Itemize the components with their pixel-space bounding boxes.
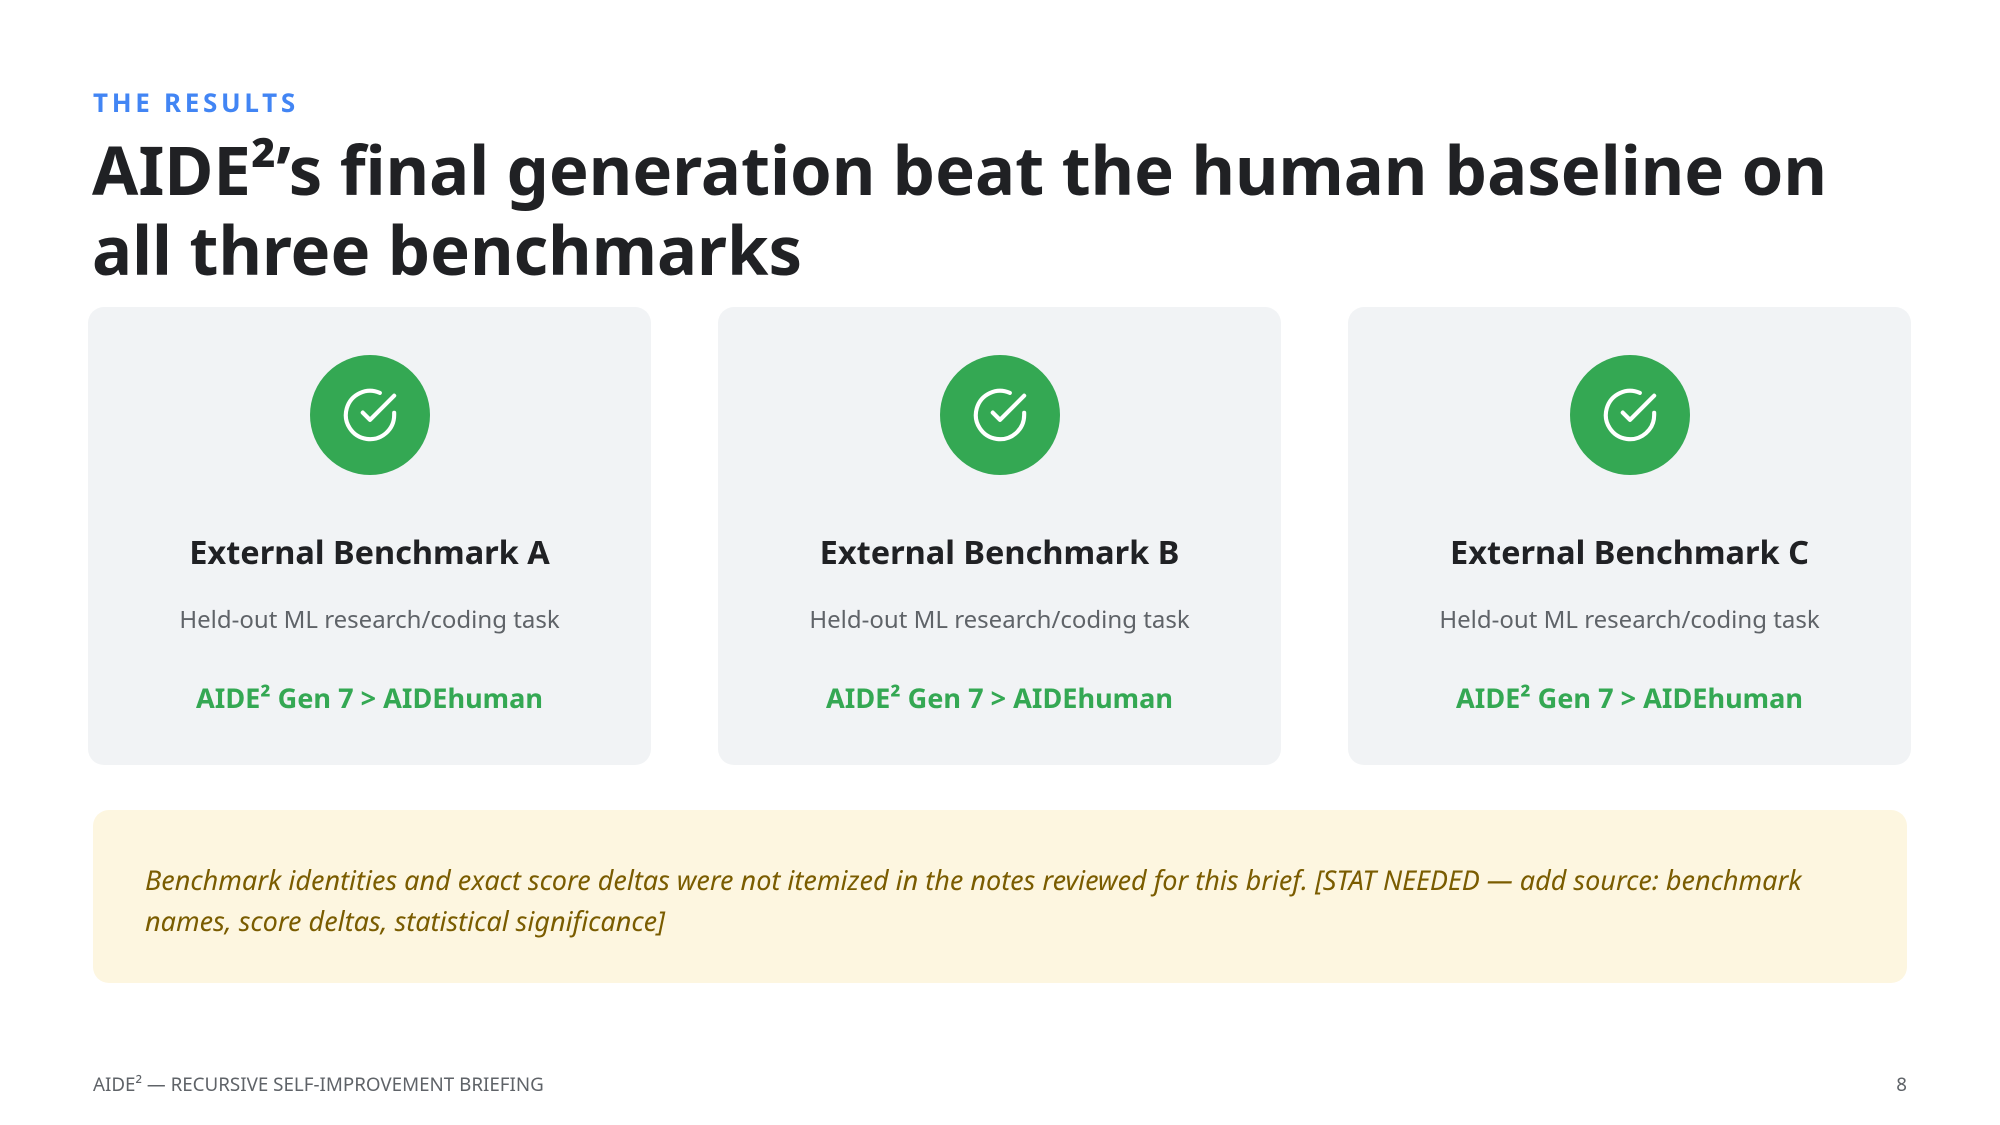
footer label: AIDE² — RECURSIVE SELF-IMPROVEMENT BRIEFING: [93, 1072, 544, 1097]
callout: caveat note: [93, 810, 1907, 983]
benchmark B description: Held-out ML research/coding task: [809, 603, 1190, 636]
title: AIDE²’s final generation beat the human baseline on: [92, 123, 1827, 215]
benchmark C result: AIDE² Gen 7 > AIDEhuman: [1456, 679, 1803, 716]
title: [92, 123, 1827, 295]
panel: benchmark B: [718, 307, 1281, 765]
benchmark B name: External Benchmark B: [820, 529, 1179, 574]
caveat text: Benchmark identities and exact score deltas were not itemized in the notes reviewed for this brief. [STAT NEEDED — add source: benchmark: [145, 861, 1802, 898]
panel: benchmark A: [88, 307, 651, 765]
icon: check circle C: [1570, 355, 1690, 475]
title: all three benchmarks: [92, 203, 802, 295]
icon: check circle B: [940, 355, 1060, 475]
benchmark C description: Held-out ML research/coding task: [1439, 603, 1820, 636]
page number: 8: [1896, 1072, 1907, 1097]
caveat text: names, score deltas, statistical significance]: [145, 902, 665, 939]
panel: benchmark C: [1348, 307, 1911, 765]
benchmark C name: External Benchmark C: [1450, 529, 1809, 574]
benchmark A name: External Benchmark A: [189, 529, 550, 574]
benchmark A result: AIDE² Gen 7 > AIDEhuman: [196, 679, 543, 716]
benchmark B result: AIDE² Gen 7 > AIDEhuman: [826, 679, 1173, 716]
benchmark A description: Held-out ML research/coding task: [179, 603, 560, 636]
caveat text: [145, 861, 1802, 939]
icon: check circle A: [310, 355, 430, 475]
eyebrow label: THE RESULTS: [93, 84, 299, 120]
